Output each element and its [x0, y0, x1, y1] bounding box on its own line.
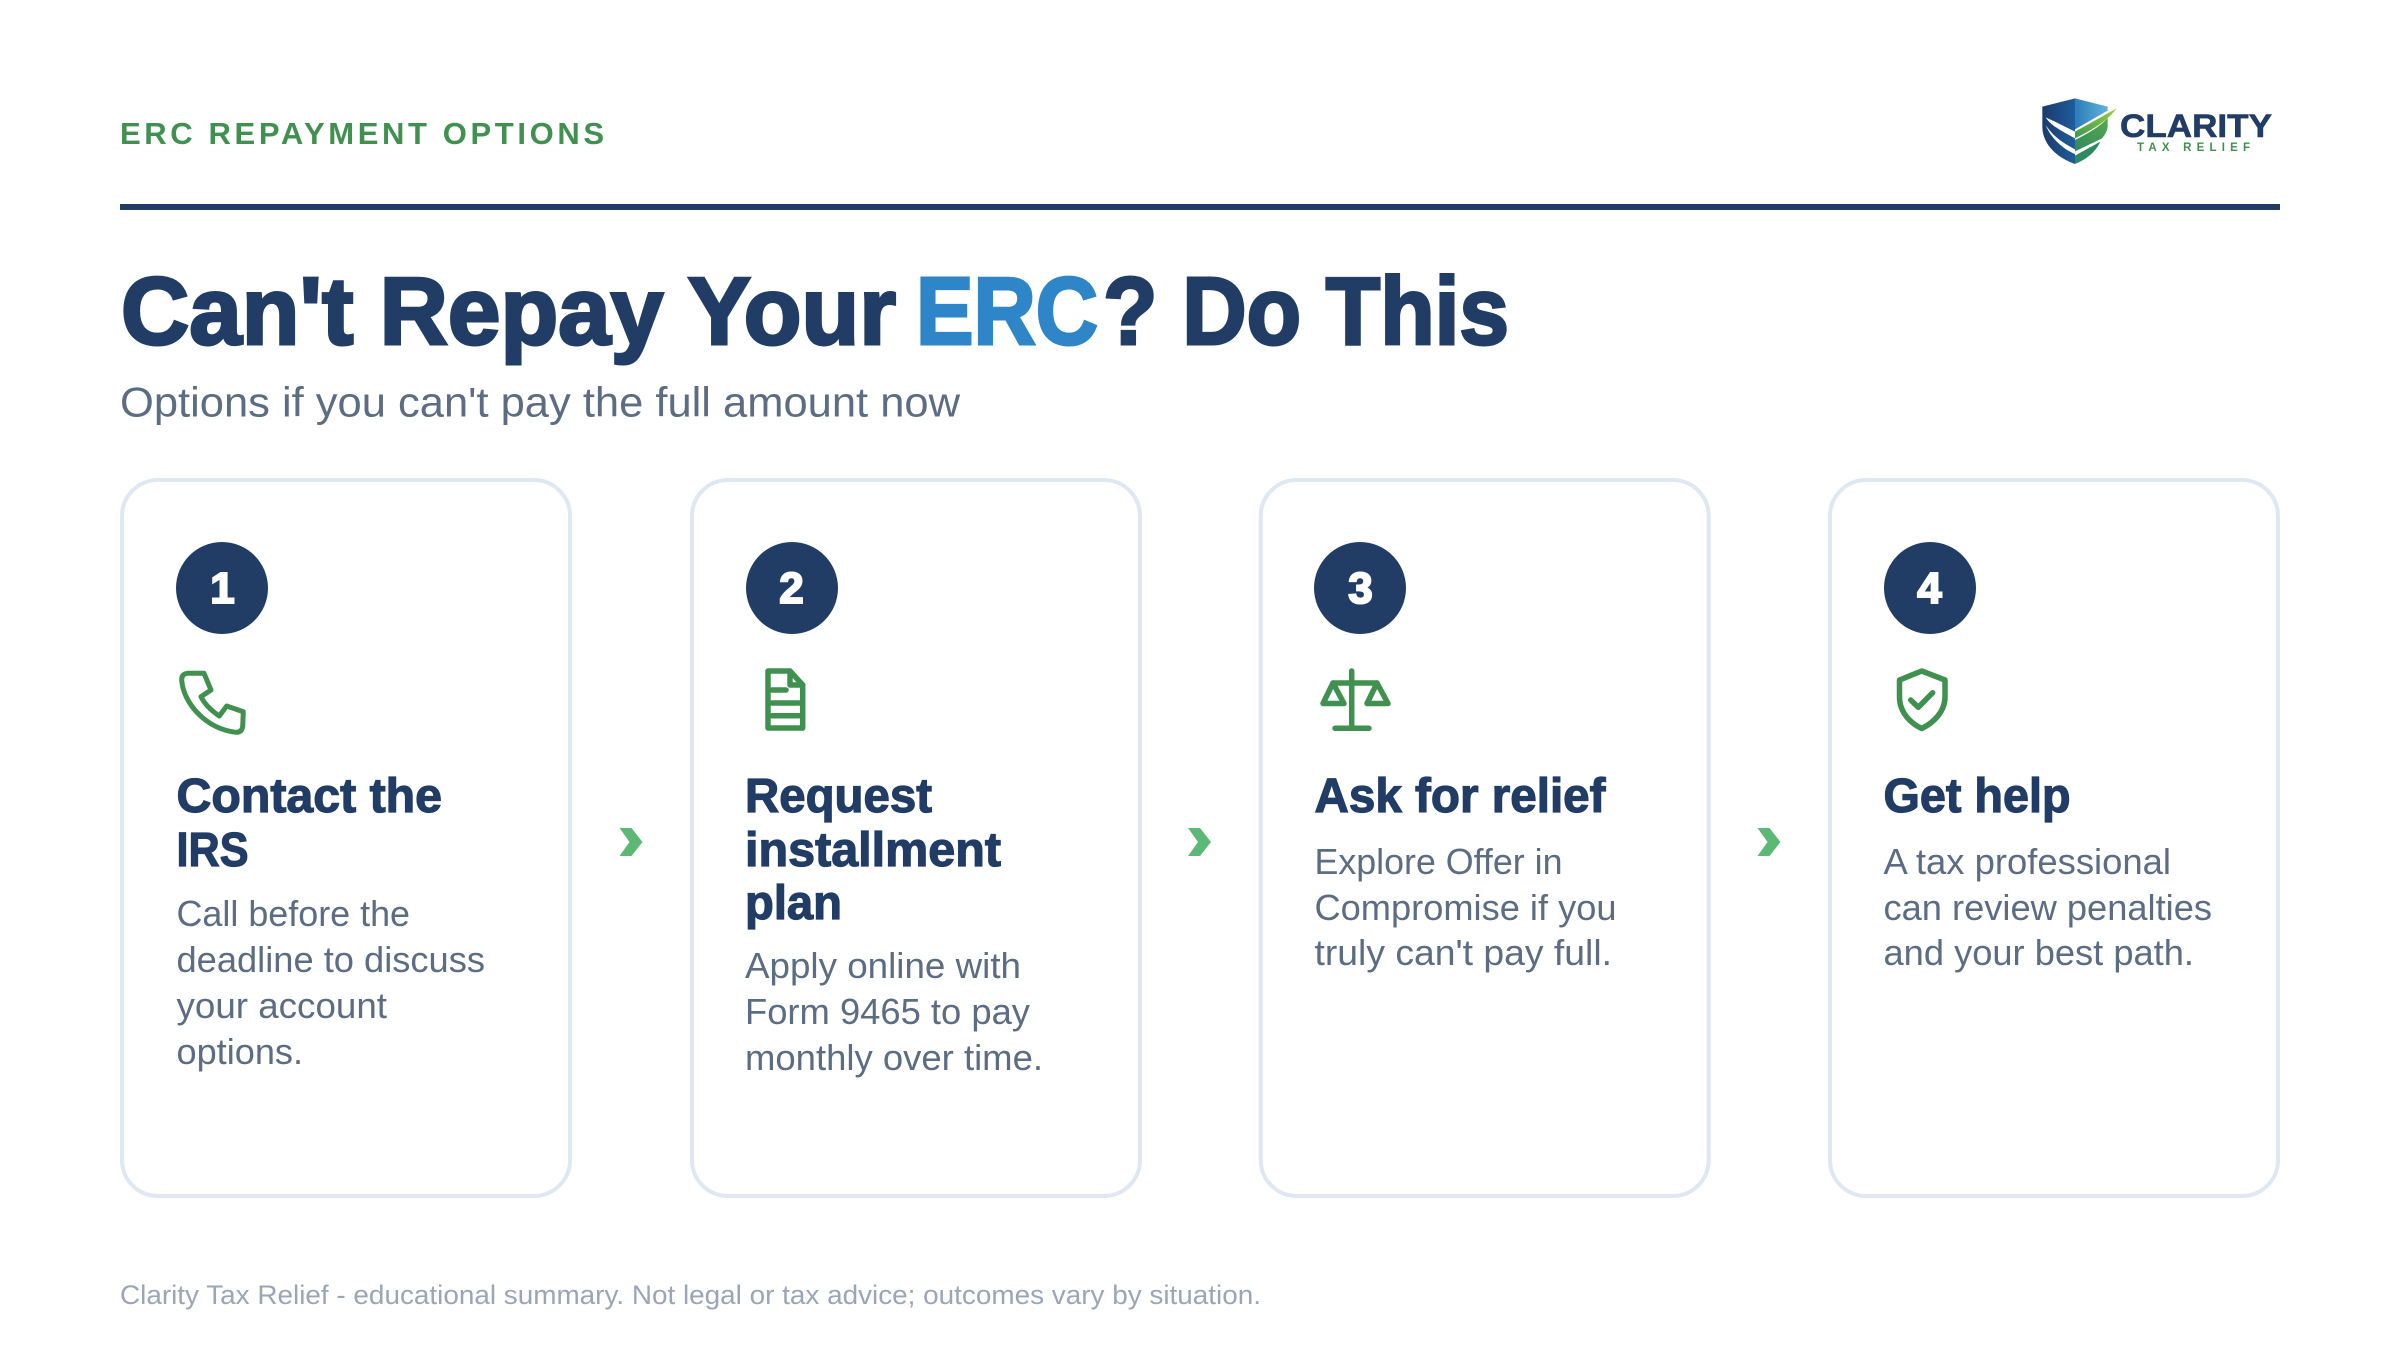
step number 4: [1884, 542, 1976, 634]
logo tagline: TAX RELIEF: [2137, 142, 2250, 154]
body text: can review penalties: [1884, 887, 2212, 928]
icon: logo shield: [2042, 98, 2117, 164]
panel: step 4 get help: [1830, 480, 2278, 1196]
icon: document: [768, 671, 803, 728]
title: ? Do This: [1103, 258, 1509, 365]
heading: Ask for relief: [1314, 770, 1607, 823]
body text: options.: [176, 1031, 303, 1072]
step number 1: 1: [210, 564, 235, 613]
heading: [745, 770, 1001, 930]
logo: Clarity Tax Relief: [2042, 98, 2272, 164]
title: [121, 258, 1509, 365]
subtitle: Options if you can't pay the full amount now: [120, 378, 961, 426]
title: ERC: [916, 258, 1098, 365]
arrow 2: [1188, 828, 1211, 856]
body text: Form 9465 to pay: [745, 991, 1030, 1032]
body text: [1884, 841, 2212, 973]
icon: scales: [1323, 671, 1388, 728]
step number 2: 2: [779, 564, 804, 613]
footer disclaimer: Clarity Tax Relief - educational summary. Not legal or tax advice; outcomes vary by situation.: [120, 1280, 1261, 1310]
step number 3: 3: [1348, 564, 1373, 613]
body text: truly can't pay full.: [1314, 932, 1612, 973]
eyebrow label: ERC REPAYMENT OPTIONS: [120, 116, 604, 151]
arrow 1: [620, 828, 642, 856]
step number 3: [1314, 542, 1406, 634]
body text: and your best path.: [1884, 932, 2194, 973]
body text: Explore Offer in: [1314, 841, 1562, 882]
title: Can't Repay Your: [121, 258, 896, 365]
heading: installment: [745, 824, 1001, 877]
heading: Request: [745, 770, 932, 823]
header rule: [120, 204, 2280, 210]
body text: [1314, 841, 1616, 973]
body text: Call before the: [176, 893, 410, 934]
heading: plan: [745, 877, 842, 930]
panel: step 1 contact the IRS: [122, 480, 570, 1196]
body text: A tax professional: [1884, 841, 2171, 882]
heading: Get help: [1884, 770, 2070, 823]
heading: Contact the: [176, 770, 442, 823]
icon: shield check: [1900, 671, 1945, 728]
body text: monthly over time.: [745, 1037, 1043, 1078]
body text: Compromise if you: [1314, 887, 1616, 928]
logo wordmark: CLARITY: [2120, 108, 2272, 144]
body text: [745, 945, 1043, 1078]
step number 4: 4: [1917, 564, 1942, 613]
step number 2: [746, 542, 838, 634]
arrow 3: [1758, 828, 1780, 856]
panel: step 3 ask for relief: [1261, 480, 1709, 1196]
body text: [176, 893, 485, 1072]
heading: IRS: [176, 824, 248, 877]
icon: phone: [182, 673, 243, 732]
heading: [176, 770, 442, 877]
step number 1: [176, 542, 268, 634]
body text: your account: [176, 985, 387, 1026]
body text: Apply online with: [745, 945, 1021, 986]
body text: deadline to discuss: [176, 939, 485, 980]
panel: step 2 request installment plan: [692, 480, 1140, 1196]
